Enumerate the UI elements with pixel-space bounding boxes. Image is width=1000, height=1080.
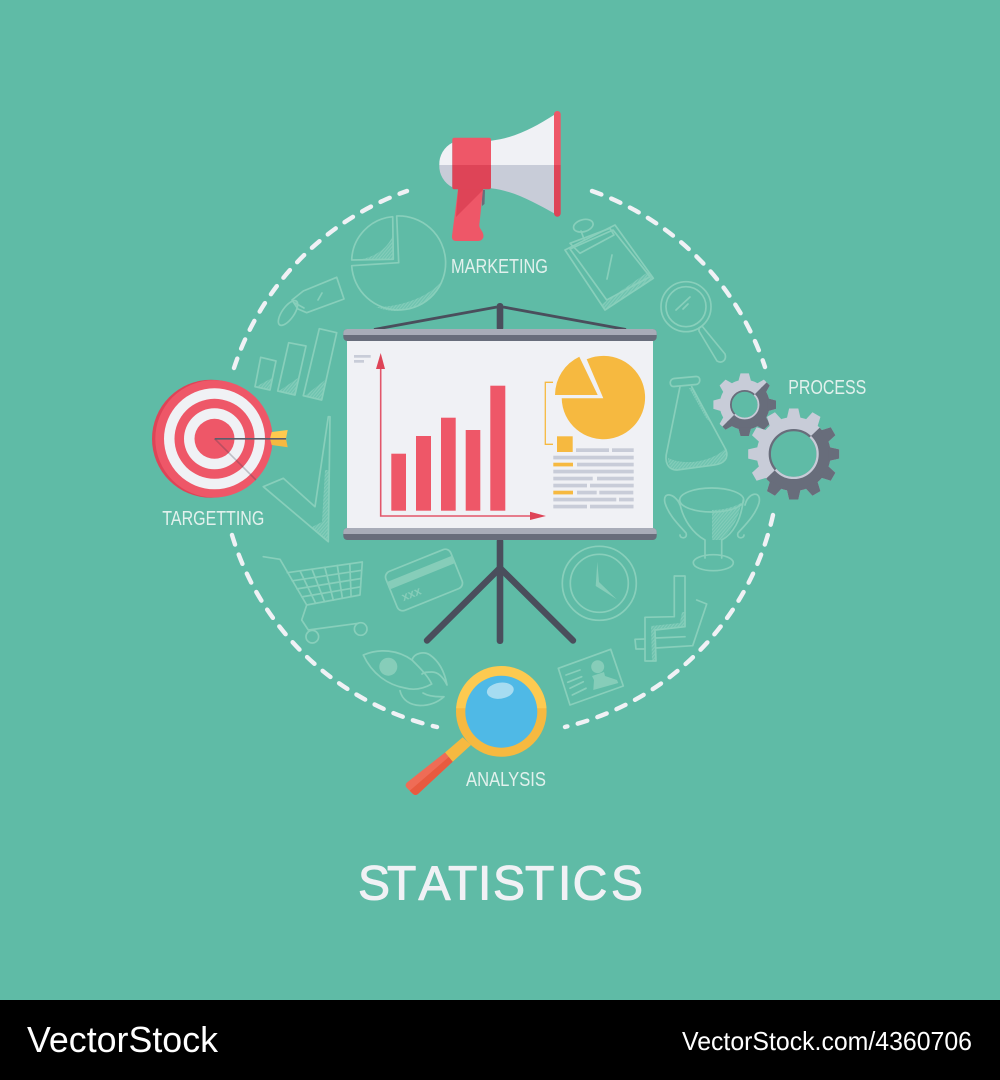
bottom roller	[343, 528, 657, 540]
label: targetting: TARGETTING	[162, 508, 264, 530]
screen sheet	[347, 338, 653, 530]
icon: shopping cart sketch	[263, 557, 367, 643]
bars	[391, 386, 505, 511]
icon: check mark sketch	[263, 417, 330, 542]
icon: megaphone	[439, 111, 561, 241]
icon: magnifier sketch	[661, 282, 725, 362]
label: process: PROCESS	[788, 377, 866, 399]
sketched background icons	[255, 216, 759, 706]
icon: gears	[713, 373, 839, 500]
icon: id card sketch	[558, 649, 623, 705]
icon: rocket sketch	[363, 651, 447, 706]
icon: magnifying glass	[406, 666, 547, 795]
pie bracket and swatch	[545, 382, 573, 452]
axes	[376, 353, 546, 520]
footer brand: VectorStock	[27, 1019, 219, 1060]
top roller	[343, 329, 657, 341]
bar chart	[376, 353, 546, 520]
icon: pie sketch	[352, 216, 446, 311]
icon: clipboard sketch	[565, 217, 653, 310]
footer url: VectorStock.com/4360706	[682, 1026, 972, 1056]
label: marketing: MARKETING	[451, 256, 548, 278]
pie chart	[555, 356, 645, 439]
projector screen	[343, 303, 657, 644]
icon: flask sketch	[666, 376, 727, 470]
icon: credit card sketch: xxx	[399, 583, 423, 604]
icon: credit card sketch	[384, 547, 464, 613]
small gear	[713, 373, 776, 436]
dashed circle	[232, 191, 773, 727]
stand top arms	[374, 303, 626, 331]
icon: trophy sketch	[665, 488, 759, 571]
icon: price tag sketch	[275, 277, 344, 328]
footer bar	[0, 1000, 1000, 1080]
text lines	[553, 448, 634, 508]
icon: target	[152, 380, 288, 498]
label: analysis: ANALYSIS	[466, 769, 546, 791]
title: STATISTICS	[358, 858, 643, 910]
tripod legs	[427, 538, 573, 644]
icon: chevrons sketch	[635, 576, 707, 661]
large gear	[748, 408, 839, 500]
icon: clock sketch	[562, 546, 636, 620]
icon: bars sketch	[255, 329, 337, 400]
legend ticks	[354, 355, 371, 363]
